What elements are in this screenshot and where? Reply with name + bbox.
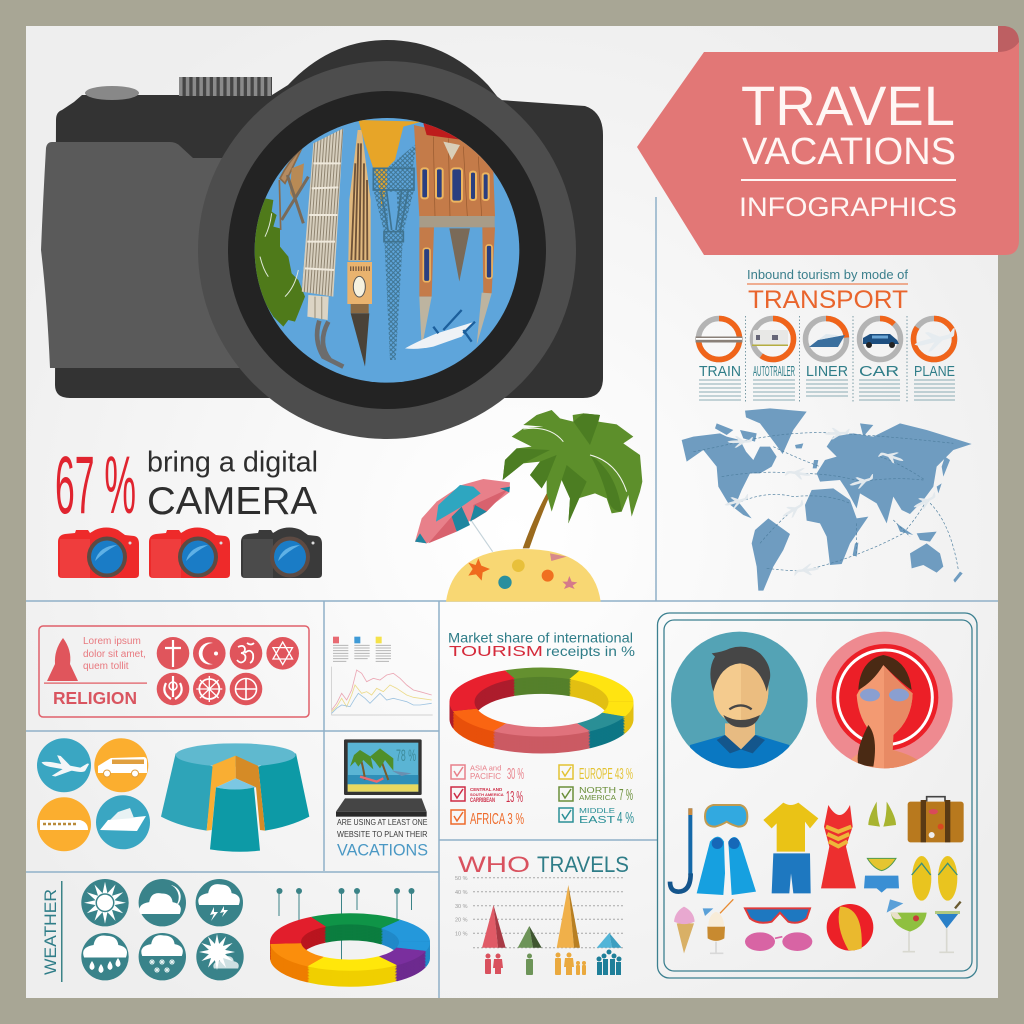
lens landmarks scene — [253, 117, 523, 387]
cake right side — [258, 753, 309, 831]
who travels heading: TRAVELS — [537, 852, 629, 877]
legend north america — [559, 786, 633, 804]
who travels heading — [458, 852, 629, 877]
tourism ring chart — [462, 672, 621, 749]
digital camera statistic — [55, 440, 322, 578]
legend middle east: 4 % — [617, 810, 634, 827]
market share heading: TOURISM — [449, 643, 543, 660]
legend middle east: MIDDLE — [579, 808, 615, 815]
big ben — [347, 130, 372, 367]
small line chart — [332, 637, 433, 715]
diving mask — [705, 805, 747, 827]
man portrait — [671, 632, 808, 770]
ribbon fold — [998, 26, 1019, 60]
airplanes on map — [723, 428, 939, 577]
lens outer ring — [198, 61, 576, 439]
digital camera statistic: 67 % — [55, 440, 136, 531]
yellow t-shirt — [763, 803, 818, 852]
bikini — [867, 802, 896, 871]
swim fins — [697, 837, 756, 895]
market share heading: Market share of international — [448, 630, 633, 646]
circle cross icon — [230, 673, 262, 705]
transport labels: LINER — [806, 363, 848, 380]
car gauge — [860, 318, 900, 360]
axis labels and grid: 20 % — [455, 918, 468, 924]
star of david icon — [266, 637, 299, 670]
legend north america: 7 % — [619, 787, 633, 804]
lorem text: quem tollit — [83, 661, 129, 672]
legend middle east — [559, 808, 634, 827]
laptop percentage: 78 % — [396, 746, 416, 765]
sun cloud icon — [196, 933, 244, 980]
suitcase — [908, 797, 964, 842]
transport panel — [696, 268, 958, 402]
golden dome — [358, 120, 422, 208]
gear and portraits — [670, 632, 964, 953]
beach ball — [827, 904, 873, 951]
parliament building — [414, 120, 495, 348]
tourism market share panel — [448, 630, 635, 828]
blue shorts — [772, 853, 811, 893]
pyramid groups — [597, 933, 622, 948]
thunder cloud icon — [196, 879, 243, 926]
eiffel tower — [373, 143, 417, 360]
mode dial — [179, 77, 272, 96]
liner gauge — [806, 318, 846, 360]
laptop panel — [336, 739, 428, 860]
dark camera three — [241, 528, 322, 578]
legend central south america: CENTRAL AND — [470, 787, 503, 792]
laptop caption: WEBSITE TO PLAN THEIR — [337, 830, 428, 839]
teal cake chart — [161, 743, 309, 852]
legend central south america — [451, 787, 523, 806]
title text: INFOGRAPHICS — [739, 192, 957, 222]
title text: TRAVEL — [741, 74, 955, 137]
weather ring chart — [286, 919, 414, 981]
martini — [935, 902, 961, 952]
pyramid couples — [482, 905, 506, 948]
transport labels: CAR — [859, 363, 899, 380]
khanda icon — [157, 673, 189, 705]
ribbon banner — [637, 42, 1019, 255]
dharma wheel icon — [193, 673, 226, 705]
pink series — [332, 670, 432, 710]
laptop illustration — [336, 739, 427, 817]
pink sunglasses — [745, 932, 812, 951]
axis labels and grid: 40 % — [455, 890, 468, 896]
legend asia pacific: PACIFIC — [470, 772, 501, 781]
axis labels and grid: 50 % — [455, 876, 468, 882]
tourism market share panel: 30 % — [507, 766, 524, 783]
religion panel — [39, 626, 309, 717]
legend asia pacific: ASIA and — [470, 764, 501, 772]
travellers and gear panel — [658, 613, 977, 978]
market share heading — [448, 630, 635, 660]
beach umbrella — [415, 479, 510, 552]
plane circle — [37, 738, 91, 792]
axis labels and grid: 30 % — [455, 904, 468, 910]
moon cloud icon — [139, 879, 186, 926]
icon: couple — [485, 954, 503, 974]
transport description lines — [699, 380, 955, 400]
laptop caption — [337, 818, 428, 839]
transport subheading: Inbound tourism by mode of — [747, 268, 909, 282]
statistic text: bring a digital — [147, 446, 318, 478]
legend middle east: EAST — [579, 815, 615, 826]
transport labels: TRAIN — [699, 363, 741, 380]
legend north america: AMERICA — [579, 795, 616, 802]
ship circle — [96, 795, 150, 849]
cake left side — [161, 753, 213, 831]
bus circle — [94, 738, 148, 792]
shutter button — [85, 86, 139, 100]
om icon — [230, 637, 262, 670]
legend central south america: CARRIBEAN — [470, 798, 495, 804]
religion divider and heading: RELIGION — [53, 688, 137, 708]
white airplane — [405, 310, 475, 349]
red camera two — [149, 528, 230, 578]
pulled slice — [210, 778, 260, 852]
margarita — [887, 899, 927, 952]
market share heading: receipts in % — [546, 643, 635, 659]
title ribbon — [637, 26, 1019, 255]
weather pins — [276, 888, 414, 966]
palm foliage — [253, 198, 305, 327]
icon: family — [555, 952, 586, 975]
chart axes — [332, 667, 433, 715]
mode circles panel — [37, 738, 309, 852]
tourism market share panel: 13 % — [506, 789, 523, 806]
continents — [682, 408, 972, 591]
lorem text: dolor sit amet, — [83, 649, 146, 660]
windmill — [279, 148, 308, 230]
woman portrait — [816, 632, 953, 770]
icon: single traveller — [526, 954, 533, 975]
swim trunks — [864, 876, 899, 893]
pyramid families — [557, 885, 580, 948]
crescent icon — [193, 637, 226, 670]
transport labels: AUTOTRAILER — [753, 363, 795, 380]
religion divider and heading — [44, 682, 147, 708]
ice cream — [674, 907, 695, 953]
world map with flight routes — [682, 408, 972, 591]
laptop caption: ARE USING AT LEAST ONE — [337, 818, 428, 827]
lens inner ring — [228, 91, 546, 409]
weather panel — [42, 879, 414, 982]
icon: praying hands — [47, 638, 78, 681]
icon: tour group — [596, 950, 622, 975]
palm leaves — [503, 410, 642, 523]
beach island illustration — [415, 410, 642, 602]
legend europe — [559, 765, 633, 783]
train gauge — [696, 318, 742, 360]
shells and starfish — [468, 553, 577, 589]
transport labels: PLANE — [914, 363, 955, 380]
blue series — [332, 693, 432, 713]
rain icon — [81, 933, 129, 980]
panel grid lines — [26, 197, 998, 998]
legend north america: NORTH — [579, 786, 616, 795]
orange wedge — [207, 756, 265, 831]
axis labels and grid — [455, 876, 625, 948]
title text — [739, 74, 957, 222]
lorem text — [83, 636, 146, 672]
cross icon — [157, 637, 189, 670]
axis labels and grid: 10 % — [455, 932, 468, 938]
flip flops — [912, 856, 957, 901]
chart legend — [333, 637, 391, 661]
flight routes — [693, 433, 958, 571]
statistic text — [147, 446, 318, 523]
camera grip — [41, 142, 260, 368]
religion frame — [39, 626, 309, 717]
transport heading: TRANSPORT — [748, 286, 908, 314]
legend africa: AFRICA 3 % — [470, 811, 524, 828]
sunny icon — [81, 879, 129, 926]
large camera illustration — [41, 40, 603, 439]
legend asia pacific — [451, 764, 524, 783]
who travels heading: WHO — [458, 852, 530, 877]
cocktail drink — [703, 899, 733, 953]
cake top — [176, 743, 296, 767]
camera body — [55, 40, 603, 398]
tourism market share panel: EUROPE 43 % — [579, 766, 633, 783]
vacations word: VACATIONS — [337, 842, 428, 860]
red camera one — [58, 528, 139, 578]
pyramid singles — [518, 926, 542, 948]
double rounded frame — [658, 613, 977, 978]
yellow series — [332, 685, 432, 712]
lorem text: Lorem ipsum — [83, 636, 141, 647]
leaning tower — [302, 128, 343, 367]
sand mound — [446, 549, 601, 602]
who travels panel — [455, 852, 629, 975]
weather heading: WEATHER — [42, 889, 60, 975]
red sunglasses — [745, 908, 810, 923]
legend africa — [451, 810, 524, 828]
dotted separators — [746, 316, 907, 402]
autotrailer gauge — [752, 318, 794, 360]
transport labels — [699, 363, 955, 380]
statistic text: CAMERA — [147, 480, 317, 523]
legend central south america: SOUTH AMERICA — [470, 792, 504, 797]
snorkel — [670, 808, 692, 892]
train circle — [37, 797, 91, 851]
palm trunk — [523, 493, 549, 548]
title text: VACATIONS — [742, 131, 956, 173]
snow icon — [139, 933, 186, 980]
red dress — [821, 805, 856, 888]
weather divider — [61, 881, 62, 982]
plane gauge — [913, 318, 958, 360]
